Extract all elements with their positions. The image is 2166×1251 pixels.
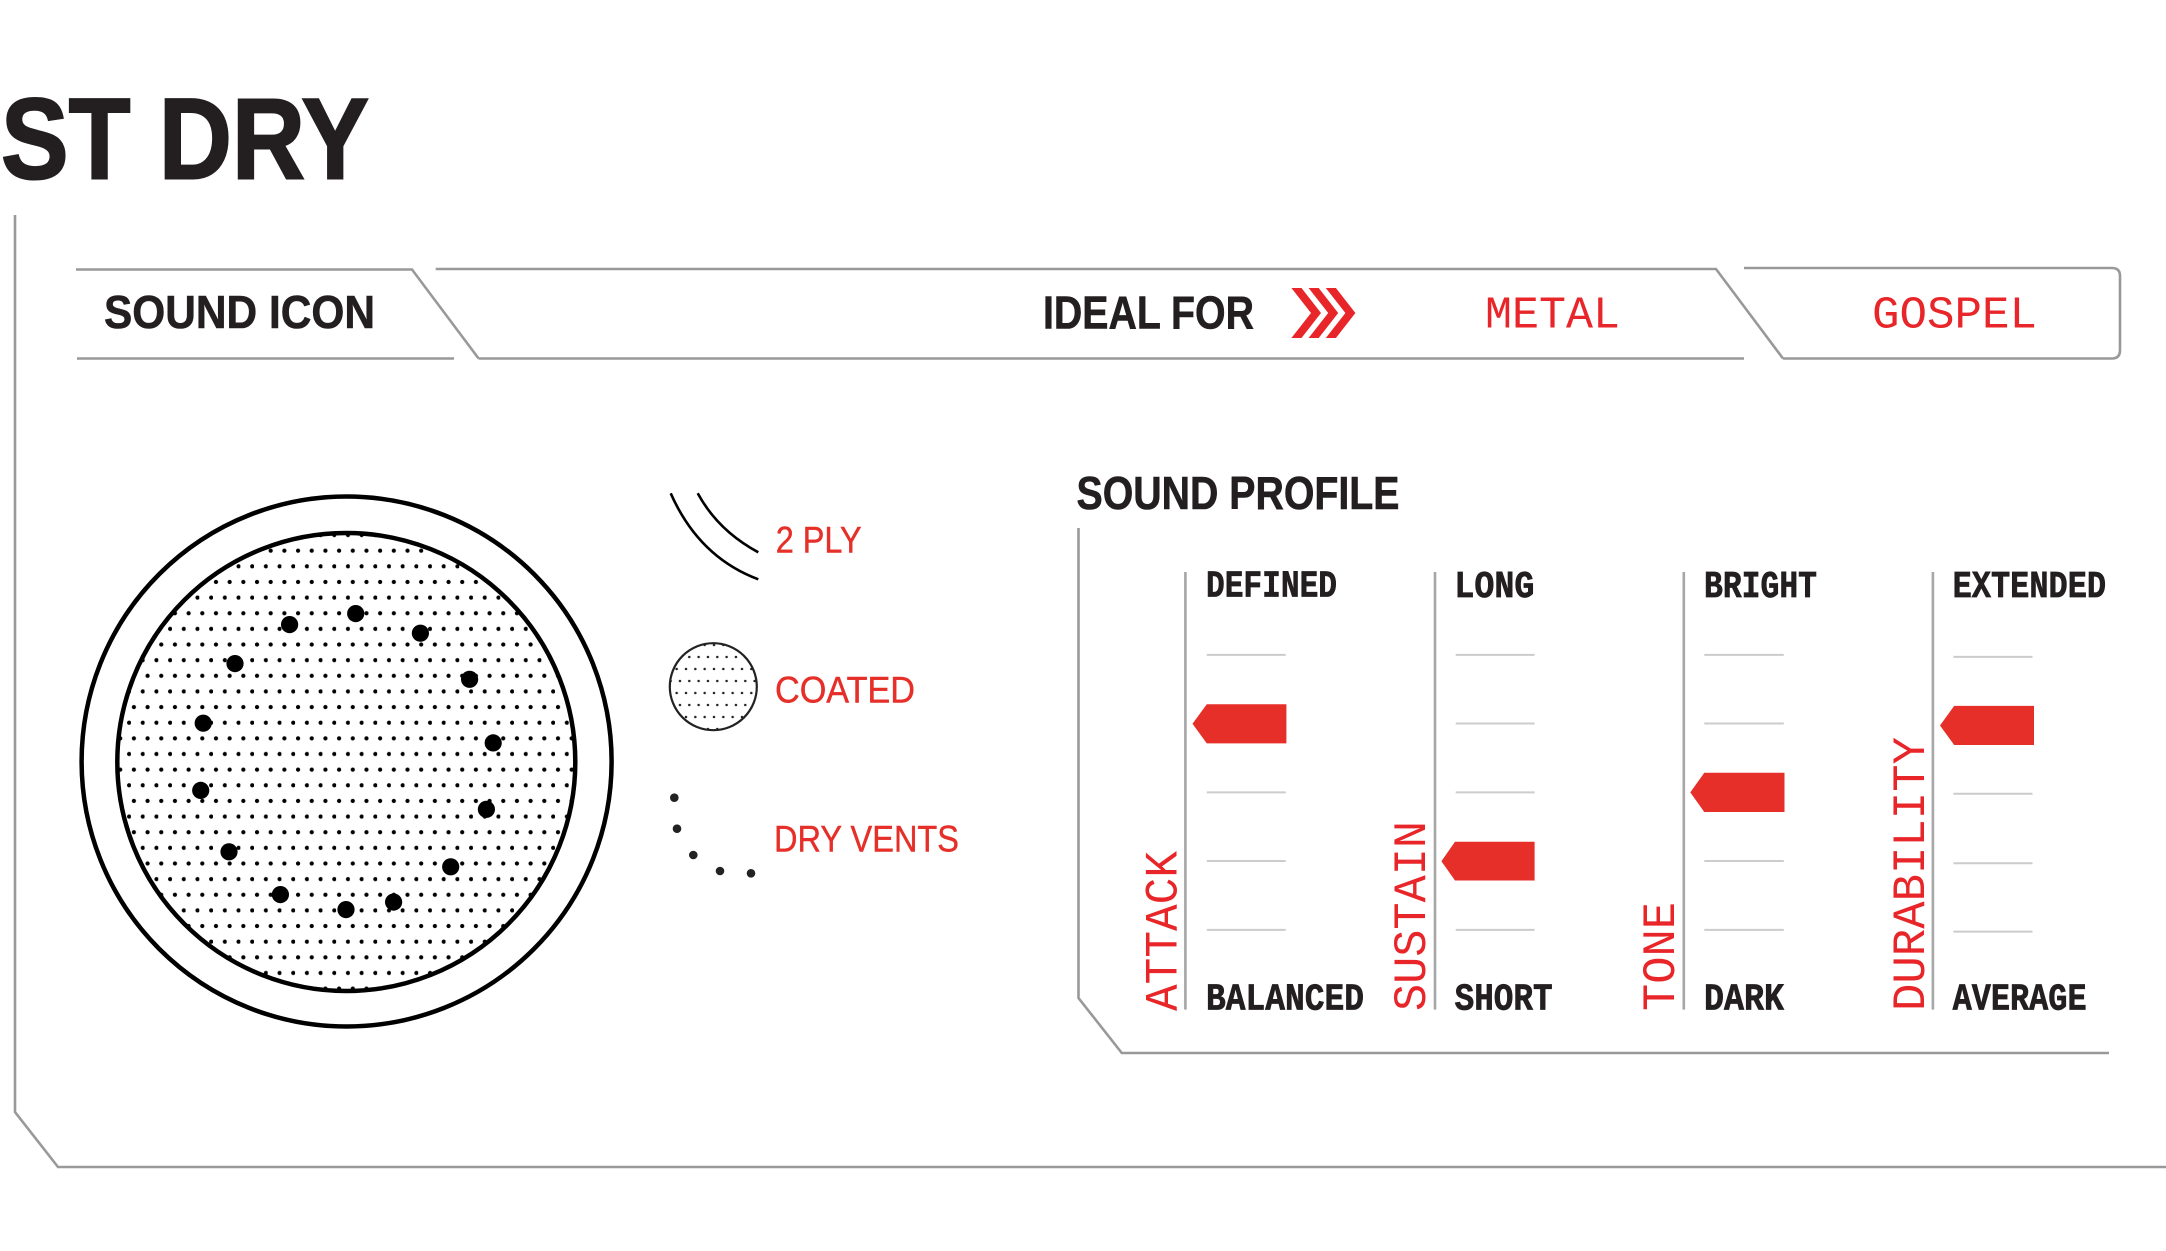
label: defined: DEFINED <box>1206 565 1337 608</box>
icon: drumhead sound icon <box>82 496 612 1026</box>
marker: durability level <box>1940 706 2034 745</box>
label: attack: ATTACK <box>1138 851 1190 1011</box>
chart: durability scale <box>1886 566 2106 1022</box>
icon: vent dots <box>670 793 755 878</box>
label: coated: COATED <box>775 670 915 710</box>
chart: attack scale <box>1138 565 1364 1022</box>
chart: tone scale <box>1636 566 1817 1022</box>
label: durability: DURABILITY <box>1886 737 1938 1011</box>
tab: sound icon <box>76 270 479 358</box>
panel: outer frame <box>15 215 2166 1167</box>
chart: sustain scale <box>1387 566 1553 1022</box>
label: extended: EXTENDED <box>1953 566 2106 609</box>
marker: sustain level <box>1441 842 1535 880</box>
label: short: SHORT <box>1455 979 1553 1022</box>
label: 2 ply: 2 PLY <box>776 519 862 560</box>
heading: ideal for: IDEAL FOR <box>1043 286 1254 338</box>
label: average: AVERAGE <box>1953 979 2087 1022</box>
heading: sound profile: SOUND PROFILE <box>1076 467 1400 519</box>
legend: dry vents <box>670 793 959 878</box>
label: dry vents: DRY VENTS <box>774 819 959 860</box>
label: tone: TONE <box>1636 902 1688 1011</box>
icon: coated circle <box>670 643 757 730</box>
tab: gospel <box>1744 268 2120 358</box>
title: ST DRY <box>1 75 369 203</box>
label: dark: DARK <box>1704 979 1784 1022</box>
label: balanced: BALANCED <box>1206 979 1364 1022</box>
heading: sound icon: SOUND ICON <box>104 286 375 338</box>
label: sustain: SUSTAIN <box>1387 821 1439 1011</box>
label: bright: BRIGHT <box>1704 566 1817 609</box>
label: metal: METAL <box>1485 290 1620 342</box>
vent dots ring <box>192 605 502 918</box>
icon: triple chevron arrow <box>1291 288 1355 338</box>
label: long: LONG <box>1454 566 1534 609</box>
marker: tone level <box>1690 773 1784 812</box>
marker: attack level <box>1192 704 1286 743</box>
legend: 2 ply <box>671 493 862 579</box>
legend: coated <box>670 643 915 730</box>
label: gospel: GOSPEL <box>1872 290 2037 342</box>
panel: header tabs <box>76 268 2120 358</box>
tab: ideal for and metal <box>436 269 1783 358</box>
panel: sound profile frame <box>1078 528 2109 1053</box>
icon: two ply arcs <box>671 493 758 579</box>
